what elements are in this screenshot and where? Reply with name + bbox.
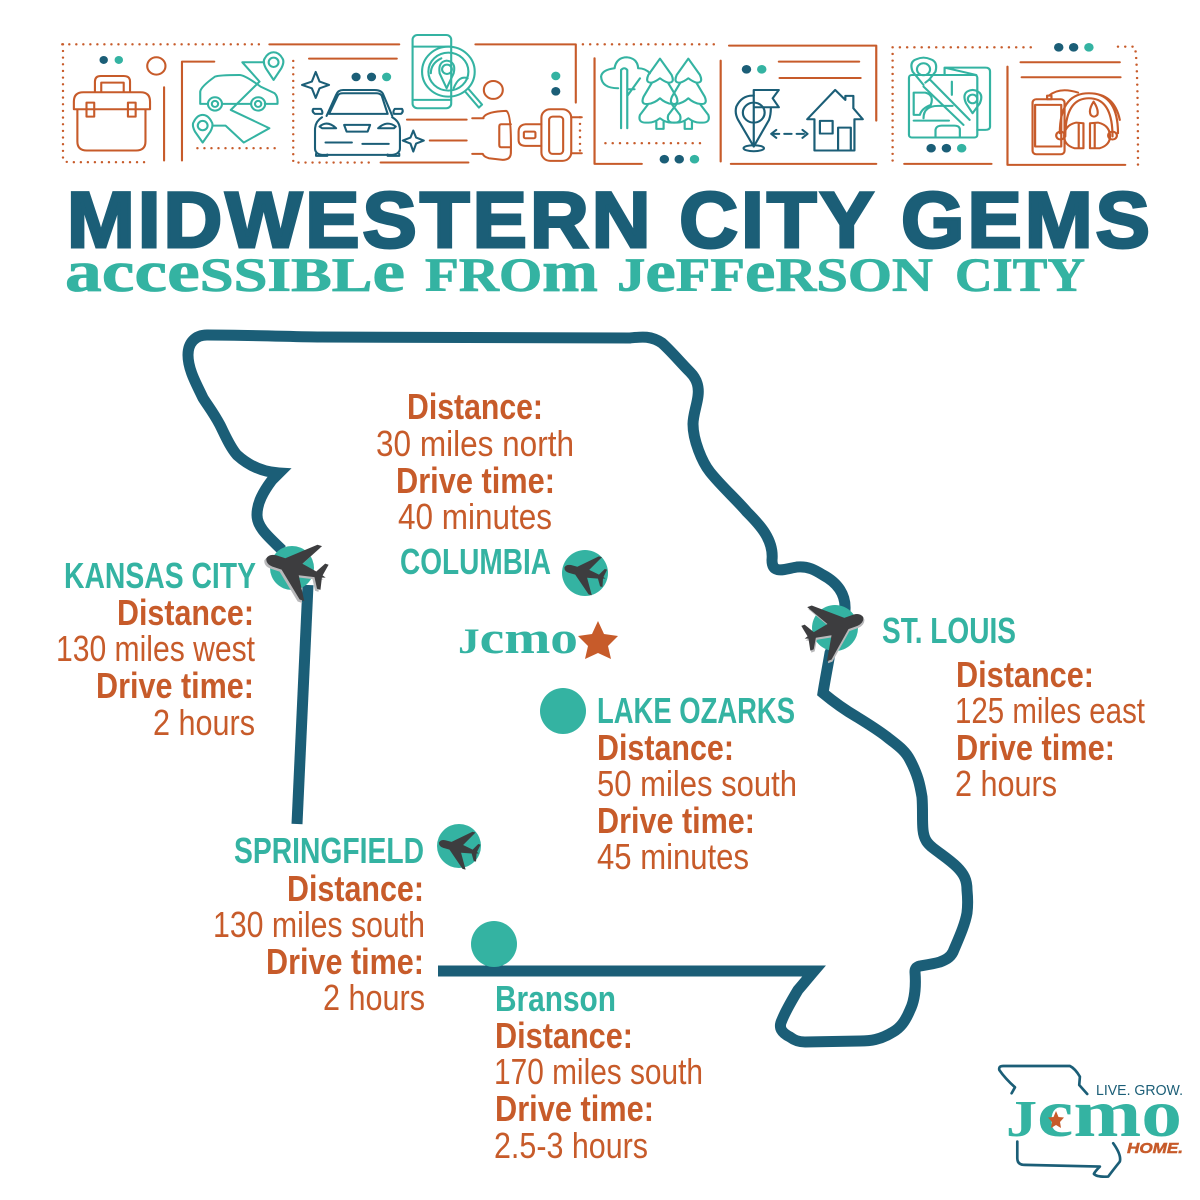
text block: Lake Ozarks: 45 minutes: [597, 836, 749, 877]
marker: Branson: [471, 921, 517, 967]
text block: Branson: Distance:: [495, 1015, 633, 1056]
text block: Branson: 2.5-3 hours: [494, 1125, 648, 1166]
subtitle: FRO m: [425, 239, 598, 304]
marker: Kansas City airport: [255, 531, 335, 607]
text block: Springfield: SPRINGFIELD: [234, 830, 424, 871]
text block: Columbia: Drive time:: [396, 460, 555, 501]
text block: Kansas City: [56, 555, 256, 743]
subtitle: CITY: [955, 249, 1085, 302]
text block: Lake Ozarks: LAKE OZARKS: [597, 690, 795, 731]
text block: St. Louis: ST. LOUIS: [882, 610, 1016, 651]
marker: Springfield airport: [434, 824, 484, 872]
text block: Branson: [494, 978, 703, 1166]
text block: Columbia: 30 miles north: [376, 423, 574, 464]
icon: phone with magnifier map pin: [413, 35, 482, 108]
text block: Springfield: Drive time:: [266, 941, 424, 982]
title: MIDWESTERN CITY GEMS: [67, 175, 1153, 264]
logo: JCMO Home: [999, 1066, 1183, 1177]
text block: Lake Ozarks: [597, 690, 797, 877]
Jefferson City marker: Jcmo: [458, 612, 578, 663]
state outline map: [188, 335, 968, 1042]
text block: Lake Ozarks: Distance:: [597, 727, 734, 768]
text block: Columbia: COLUMBIA: [400, 541, 551, 582]
icon: phone with headphones: [1033, 43, 1120, 154]
text block: Branson: Drive time:: [495, 1088, 654, 1129]
text block: St. Louis: 125 miles east: [955, 690, 1145, 731]
text block: Springfield: Distance:: [287, 868, 424, 909]
text block: Columbia: [376, 386, 574, 582]
marker: Lake Ozarks: [540, 688, 586, 734]
text block: Lake Ozarks: 50 miles south: [597, 763, 797, 804]
marker: Columbia airport: [559, 548, 611, 598]
text block: St. Louis: 2 hours: [955, 763, 1057, 804]
header icon band, left half: [62, 35, 582, 163]
text block: Springfield: 2 hours: [323, 977, 425, 1018]
text block: Lake Ozarks: Drive time:: [597, 800, 755, 841]
text block: Kansas City: 2 hours: [153, 702, 255, 743]
text block: Kansas City: 130 miles west: [56, 628, 255, 669]
subtitle: acce SSIBL e: [65, 239, 405, 304]
icon: car front view with sparkles: [302, 72, 424, 156]
icon: folded map with pins: [909, 58, 990, 153]
text block: Springfield: 130 miles south: [213, 904, 425, 945]
marker: St. Louis airport: [795, 590, 874, 668]
logo: JCMO Home: LIVE. GROW.: [1096, 1083, 1183, 1099]
header icon band, right half: [580, 43, 1138, 167]
icon: car on a map route: [193, 52, 283, 143]
Jefferson City marker: [458, 612, 618, 663]
subtitle: JeFFeRSON: [617, 239, 933, 304]
text block: Branson: 170 miles south: [494, 1051, 703, 1092]
text block: Kansas City: KANSAS CITY: [64, 555, 256, 596]
logo: JCMO Home: HOME.: [1127, 1140, 1183, 1157]
text block: Kansas City: Distance:: [117, 592, 254, 633]
icon: map pin with flag, arrow and house: [736, 65, 863, 151]
text block: Columbia: 40 minutes: [398, 496, 552, 537]
text block: Branson: Branson: [495, 978, 616, 1019]
text block: Columbia: Distance:: [407, 386, 543, 427]
text block: St. Louis: Distance:: [956, 654, 1094, 695]
text block: St. Louis: [882, 610, 1145, 804]
icon: toolbox: [74, 56, 165, 151]
icon: trees: [601, 57, 709, 164]
text block: Kansas City: Drive time:: [96, 665, 254, 706]
icon: seat belt buckle: [472, 72, 582, 161]
text block: Springfield: [213, 830, 425, 1018]
text block: St. Louis: Drive time:: [956, 727, 1115, 768]
logo: JCMO Home: Jcmo: [1006, 1075, 1182, 1151]
subtitle: [65, 239, 1085, 304]
